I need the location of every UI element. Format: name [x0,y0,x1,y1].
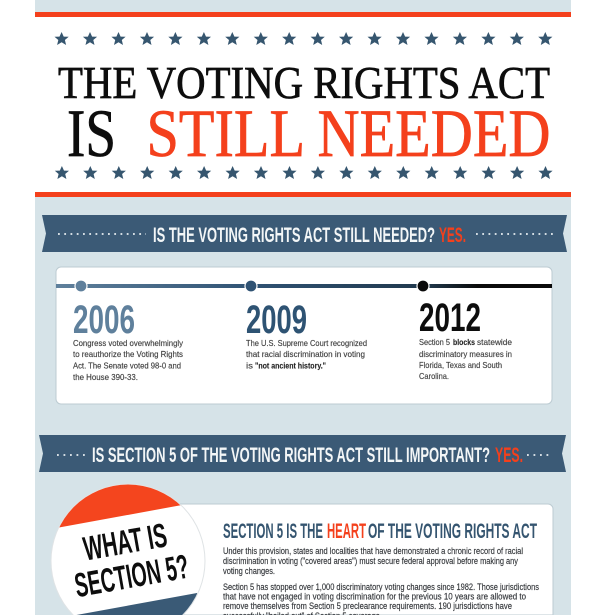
timeline line [56,284,552,288]
banner yes: YES. [495,443,523,467]
timeline dot 2006 [75,280,87,292]
banner right dots [527,454,553,456]
timeline dot 2009 [245,280,257,292]
text 2009: The U.S. Supreme Court recognized [246,338,367,348]
text 2012: Section 5 [419,337,450,347]
text 2009 [246,338,367,370]
panel: section 5 explanation [120,504,553,615]
panel: timeline [56,267,552,404]
body text: that have not engaged in voting discrimination for the previous 10 years are allowed to [223,592,526,602]
bottom row of stars [55,166,553,179]
body text: voting changes. [223,566,275,576]
text 2006 [73,338,184,382]
text 2012 [419,337,512,381]
header panel [35,12,571,197]
timeline dot 2012 [417,280,429,292]
body text: Section 5 has stopped over 1,000 discriminatory voting changes since 1982. Those jurisdictions [223,582,539,592]
top row of stars [54,32,552,45]
text 2009: that racial discrimination in voting [246,349,365,359]
banner left dots [57,454,85,456]
text 2006: Congress voted overwhelmingly [73,338,184,348]
banner: is the voting rights act still needed [42,215,567,252]
text 2006: to reauthorize the Voting Rights [73,349,183,359]
text 2012: statewide [477,337,512,347]
text 2012: Florida, Texas and South [419,360,502,370]
text 2006: Act. The Senate voted 98-0 and [73,360,181,370]
badge blue bottom [76,593,198,615]
banner right dots [476,233,553,235]
text 2009: is [246,360,253,370]
year 2009: 2009 [246,298,307,342]
year 2012: 2012 [419,296,481,340]
badge red top [59,484,180,528]
badge text [72,516,192,605]
text 2006: the House 390-33. [73,372,138,382]
title: IS [67,95,116,171]
text 2009: "not ancient history." [255,360,326,370]
text 2012: blocks [453,337,475,347]
year 2006: 2006 [73,298,135,342]
text 2012: discriminatory measures in [419,349,512,359]
top red rule [35,12,571,17]
body text: remove themselves from Section 5 preclearance requirements. 190 jurisdictions have [223,601,512,611]
bottom red rule [35,192,571,197]
heading: section 5 is the heart: HEART [327,520,366,543]
badge text: WHAT IS [81,516,170,568]
badge text: SECTION 5? [72,548,192,605]
text 2012: Carolina. [419,371,449,381]
banner: is section 5 still important [39,435,566,472]
badge: what is section 5 [50,484,206,615]
heading: section 5 is the heart [223,520,537,543]
banner left dots [58,233,146,235]
body text: Under this provision, states and localities that have demonstrated a chronic record of racial [223,546,523,556]
heading: section 5 is the heart: SECTION 5 IS THE [223,520,323,543]
title [58,57,550,171]
body text [223,546,539,615]
banner yes: YES. [439,223,466,247]
title: THE VOTING RIGHTS ACT [58,57,550,108]
body text: discrimination in voting ("covered areas") must secure federal approval before making any [223,556,518,566]
